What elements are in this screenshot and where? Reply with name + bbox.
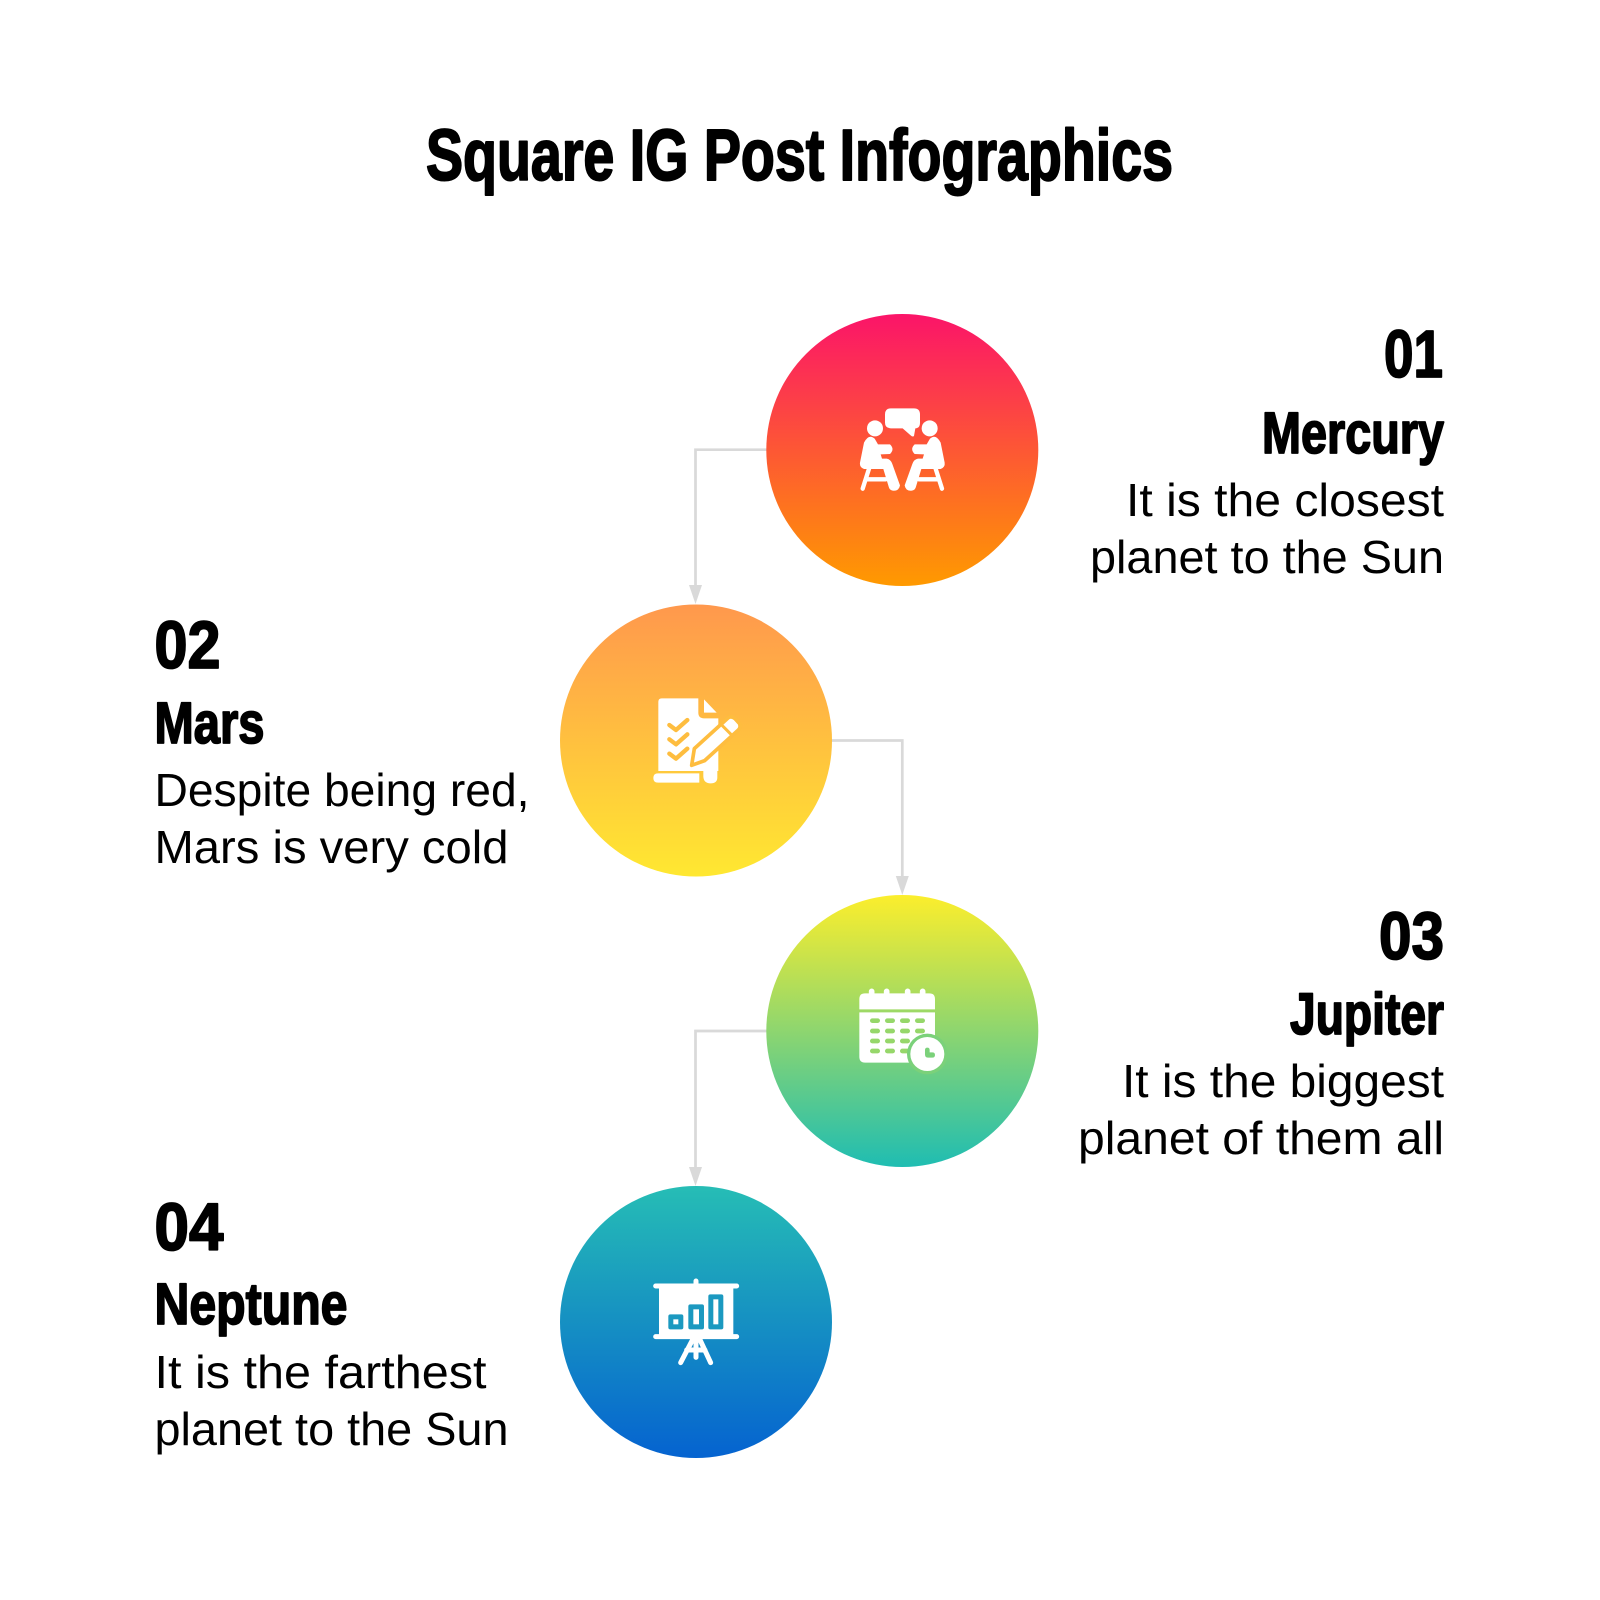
- step 2 text block: [154, 608, 530, 873]
- step 3 heading: Jupiter: [1290, 982, 1444, 1047]
- step 1 number: 01: [1384, 317, 1443, 392]
- step 1 circle with icon: [766, 314, 1038, 586]
- step 4 number: 04: [154, 1190, 224, 1265]
- connector arrow: step 2 to step 3: [831, 740, 909, 895]
- step 2 heading: Mars: [154, 691, 264, 756]
- step 3 description: It is the biggest: [1122, 1055, 1444, 1107]
- step 3 description: planet of them all: [1078, 1112, 1444, 1164]
- step 2 description: [154, 764, 530, 873]
- step 1 heading: Mercury: [1262, 401, 1444, 466]
- icon: two people talking: [860, 408, 945, 491]
- step 4 description: [154, 1346, 508, 1455]
- icon: calendar and clock: [859, 991, 948, 1074]
- step 3 number: 03: [1379, 899, 1444, 974]
- connector arrow: step 1 to step 2: [689, 450, 767, 604]
- step 2 description: Mars is very cold: [154, 821, 509, 873]
- step 3 circle with icon: [766, 895, 1038, 1167]
- step 1 text block: [1090, 317, 1444, 583]
- step 2 number: 02: [154, 608, 220, 683]
- step 4 heading: Neptune: [154, 1272, 348, 1337]
- connector arrow: step 3 to step 4: [689, 1031, 767, 1186]
- step 4 circle with icon: [560, 1186, 832, 1458]
- step 2 circle with icon: [560, 604, 832, 876]
- step 3 description: [1078, 1055, 1444, 1164]
- step 1 description: [1090, 474, 1444, 583]
- step 1 description: It is the closest: [1126, 474, 1444, 526]
- title: Square IG Post Infographics: [426, 116, 1173, 196]
- icon: presentation board with bar chart: [656, 1281, 737, 1363]
- step 4 description: It is the farthest: [154, 1346, 487, 1398]
- step 1 description: planet to the Sun: [1090, 531, 1444, 583]
- step 4 description: planet to the Sun: [154, 1403, 508, 1455]
- icon: checklist and pencil: [653, 698, 740, 783]
- step 4 text block: [154, 1190, 508, 1455]
- step 2 description: Despite being red,: [154, 764, 530, 816]
- step 3 text block: [1078, 899, 1444, 1164]
